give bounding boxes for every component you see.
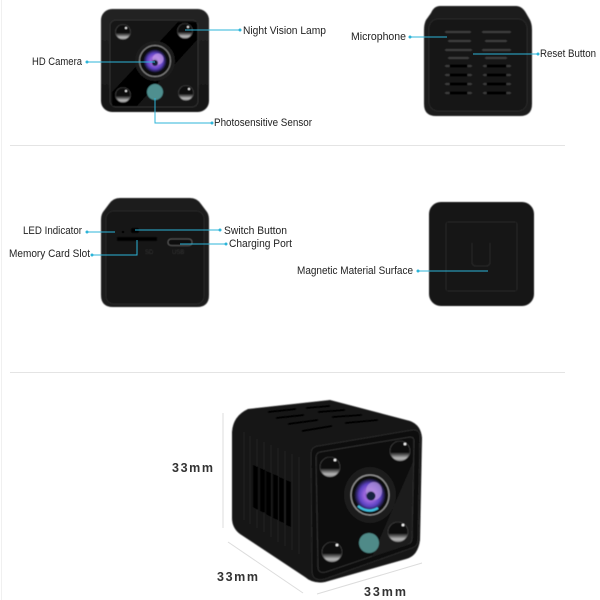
label: Charging Port: Charging Port [229,238,292,250]
camera magnetic body [429,202,534,306]
camera front body [101,9,209,112]
side ribs [244,432,299,554]
camera 3D body [232,400,422,582]
label: Memory Card Slot [9,240,137,260]
panel: ports view camera [9,198,292,307]
dimension label: width: 33mm [364,585,406,599]
camera ports body [101,198,209,307]
label: Magnetic Material Surface [297,265,488,277]
label: Night Vision Lamp [185,25,326,37]
dimension line: depth [228,542,303,593]
panel: front view camera [32,9,326,129]
label: Photosensitive Sensor: Photosensitive Sensor [214,117,312,129]
label: Microphone: Microphone [351,31,406,43]
dimension label: height: 33mm [172,461,213,475]
camera ports body: SD [145,250,154,256]
camera ports body: USB [172,250,184,256]
panel: magnetic surface camera [297,202,534,306]
label: Memory Card Slot: Memory Card Slot [9,248,90,260]
label: Switch Button: Switch Button [224,225,287,237]
label: Reset Button [473,48,596,60]
label: Switch Button [135,225,287,237]
dimension label: depth: 33mm [217,570,258,584]
label: Night Vision Lamp: Night Vision Lamp [243,25,326,37]
label: Magnetic Material Surface: Magnetic Material Surface [297,265,413,277]
label: HD Camera [32,56,155,68]
dimension line: width [317,563,422,594]
label: Charging Port [180,238,292,250]
label: LED Indicator: LED Indicator [23,225,82,237]
panel: dimensions view [172,400,422,599]
front face [311,430,420,580]
label: Photosensitive Sensor [155,98,312,129]
side vents [253,465,291,527]
label: HD Camera: HD Camera [32,56,82,68]
top vents [268,406,378,431]
panel: back view camera [351,6,596,116]
camera back body [424,6,532,116]
dimension line: height [222,413,224,528]
label: Microphone [351,31,447,43]
